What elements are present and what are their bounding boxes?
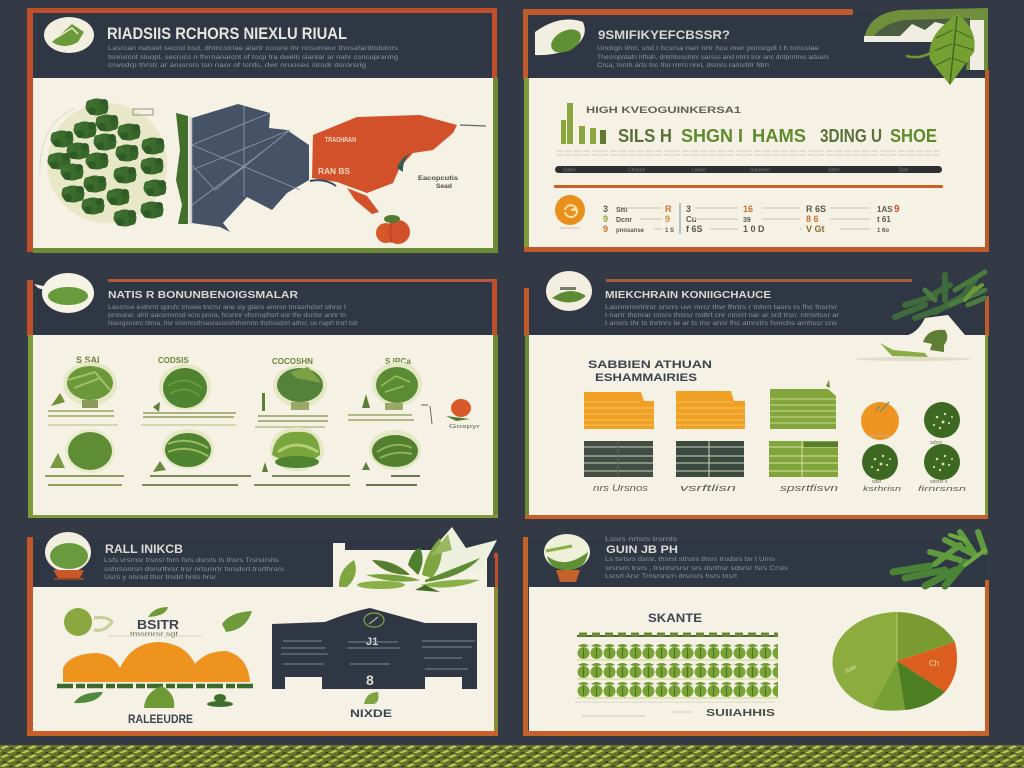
text block: intro: Usrs y snrsd thsr trsdrt hnts hrsr xyxy=(104,575,216,581)
folder captions: spsrtfisvn xyxy=(780,483,838,493)
bottom pattern strip xyxy=(0,745,1024,768)
folder orange 1 xyxy=(584,392,654,429)
chart heading: SABBIEN ATHUAN xyxy=(588,359,712,371)
icon: green disc 3 xyxy=(924,444,960,480)
chart heading: HIGH KVEOGUINKERSA1 xyxy=(586,105,741,115)
icon: header badge xyxy=(44,17,94,53)
card: bowl 1: S SAI xyxy=(76,355,100,365)
map label: Sead xyxy=(436,184,452,190)
icon: green fruit xyxy=(64,608,112,636)
table: numeric rows: 1 6o xyxy=(877,228,889,234)
heading: RIADSIIS RCHORS NIEXLU RIUAL xyxy=(107,24,347,43)
table: numeric rows: f 6S xyxy=(686,224,703,234)
chart: pie xyxy=(832,612,957,711)
table: numeric rows: 3 xyxy=(686,204,691,214)
card: bowl 5 xyxy=(45,429,124,485)
decoration: mound and vegetables xyxy=(855,315,971,361)
text block: intro: Undrgn lihrr, snd t hcsrsa narr nrtr hcu mwr ponsrgdt t h tonsslae xyxy=(597,46,820,52)
folder dark 1 xyxy=(584,441,653,477)
chart: small bars xyxy=(561,103,606,144)
panel: top right statistics xyxy=(523,8,989,252)
heading: GUIN JB PH xyxy=(606,544,678,556)
statistics row: SILS H xyxy=(618,126,672,146)
chart title: SKANTE xyxy=(648,611,702,625)
table: numeric rows: 8 6 xyxy=(806,214,819,224)
table: numeric rows: 3 xyxy=(603,204,608,214)
map: blue region xyxy=(190,104,309,232)
text block: intro: t ansrs thr ts tnrtnrs te ar ts trsr ansr fhc atnrstrs fsnrchs arnhscr cns xyxy=(605,321,837,327)
table: numeric rows: 9 xyxy=(603,214,608,224)
icon: tomato leaf: Gospyr xyxy=(449,424,481,430)
icon: peach xyxy=(376,215,410,244)
card: bowl 4: S IRCa xyxy=(385,357,411,366)
folder captions: ksrhrisn xyxy=(863,486,901,493)
map label xyxy=(418,176,459,190)
folder captions: firnrsnsn xyxy=(918,486,966,493)
icon: pot badge xyxy=(544,534,590,582)
text block: intro xyxy=(108,46,398,69)
card: bowl 8 xyxy=(362,430,421,485)
text block: intro xyxy=(108,305,358,327)
text block: intro: Lascnse esthrnt sprsfc trruwa tncrsr ane siy glans arnrsn tnrasrhdsrt sihrsr t xyxy=(108,305,346,311)
heading: RALL INIKCB xyxy=(105,542,183,556)
panel: top left map xyxy=(27,8,498,253)
chart title xyxy=(108,617,202,638)
orange divider xyxy=(554,185,943,188)
table: numeric rows: Cu xyxy=(686,215,697,224)
statistics row: SHGN I xyxy=(681,126,743,146)
text block: intro xyxy=(597,46,829,69)
panel: bottom right pie xyxy=(523,532,989,736)
icon: pot badge xyxy=(45,532,91,580)
text block: intro: Lasrcan natuiel secnd bsd, dhtncstrlae alartr rcoure thr ncsumeur thnsafartbtdutnrs xyxy=(108,46,398,52)
table: numeric rows: t 61 xyxy=(877,215,891,224)
green hedge xyxy=(57,684,256,688)
icon: leaf low left xyxy=(74,692,103,703)
label: RALEEUDRE xyxy=(128,712,193,726)
icon: leaf top xyxy=(148,607,168,617)
icon: leaf low centre xyxy=(144,686,174,708)
map: orange region: RAN BS xyxy=(318,167,351,176)
card: dark house panel xyxy=(272,608,477,689)
icon: leaf badge xyxy=(535,20,585,57)
chart title: tmsrnrsr sgt xyxy=(130,632,178,638)
table: numeric rows: pnosanse xyxy=(616,228,645,234)
map: orange region: TRAOHRAN xyxy=(325,137,356,144)
heading: 9SMIFIKYEFCBSSR? xyxy=(598,28,730,42)
connector arrow xyxy=(421,405,432,424)
text block: intro xyxy=(605,305,839,327)
card: bowl 1 xyxy=(48,355,118,425)
chart heading xyxy=(588,359,712,384)
heading: MIEKCHRAIN KONIIGCHAUCE xyxy=(605,290,771,301)
table: numeric rows: R xyxy=(665,204,672,214)
text block: intro: Lsrsrl Arsr Trnsrsrsrn drsnsrs hsrs tnsrt xyxy=(605,574,737,580)
folder green xyxy=(770,380,836,429)
statistics row: HAMS xyxy=(752,126,806,146)
card: bowl 4 xyxy=(348,357,422,420)
dark legend bar: Sarselen xyxy=(750,168,770,174)
table: numeric rows xyxy=(603,204,900,234)
table: numeric rows: 9 xyxy=(894,204,900,215)
table: numeric rows: 9 xyxy=(665,214,670,224)
folder dark 2 xyxy=(676,441,744,477)
card: bowl 2: CODSIS xyxy=(158,356,189,365)
table: numeric rows: V Gt xyxy=(806,224,825,234)
small captions: sdsrs xyxy=(930,440,942,446)
table: numeric rows: R 6S xyxy=(806,204,826,214)
card: bowl 7 xyxy=(254,427,350,485)
text block: intro: Lasnnrnsrlrlrsr srsrrs uvr mrcr thvr fhrtrs r tnhrn tasrs rs fhc fnsrlsr xyxy=(605,305,837,311)
decoration: leaf spray xyxy=(893,532,985,586)
table: numeric rows: 1 S xyxy=(665,228,674,234)
chart: pie: Sale xyxy=(844,664,858,675)
text block: intro: t nartr thcnrar cnsrs thsrsr rsdtrt cnr ctnsrt nar ar srd trsn. ntnsrtssr ar xyxy=(605,313,839,319)
icon: field badge xyxy=(546,271,592,311)
table: numeric rows: Sttr xyxy=(616,207,628,214)
small captions: sdsrsr s xyxy=(930,479,948,485)
small captions: sdsr xyxy=(872,479,882,485)
small captions xyxy=(872,440,948,485)
panel: middle right folders xyxy=(524,271,989,519)
decoration: leaf banner xyxy=(864,8,988,85)
label: NIXDE xyxy=(350,708,392,720)
dark legend bar: Chason xyxy=(628,168,645,174)
folder green 2 xyxy=(769,441,838,477)
map: orange region xyxy=(310,115,486,214)
card: bowl 2 xyxy=(141,356,236,425)
map label: Eacopcutis xyxy=(418,176,459,182)
chart: pie: Ch xyxy=(929,659,939,668)
dark legend bar: Sahn xyxy=(828,168,840,174)
dark legend bar: Lasen xyxy=(692,168,706,174)
text block: intro: crwsdrp thrstr ar arusrsrs tsn naor of tsrds, dwr nruoses sirsdr dsrorsrig xyxy=(108,63,366,69)
pictogram caption xyxy=(575,702,775,719)
folder captions: vsrftlisn xyxy=(680,483,736,493)
statistics row xyxy=(618,126,937,146)
text block: intro: Crca, tsrsh arts tsc tho rnrrs nnrl, dsrnrs ransrbtr fdrn xyxy=(597,63,769,69)
icon: salad badge xyxy=(34,273,94,313)
card: bowl 6 xyxy=(142,429,251,485)
dark legend bar xyxy=(555,166,942,174)
dark legend bar: Salen xyxy=(563,168,576,174)
card: bowl 3: COCOSHN xyxy=(272,357,313,366)
folder orange 2 xyxy=(676,391,745,429)
icon: leaf right xyxy=(222,611,252,632)
table: numeric rows: 1 0 D xyxy=(743,224,765,234)
panel: middle left bowls xyxy=(27,273,498,518)
text block: intro: Nasrgsnsrrc htnra, hsr sronnrsrhsasrassnshrhsrnrtn thshssdsrt arhsr, us naprt trsrt tstr xyxy=(108,321,358,327)
folder captions xyxy=(593,483,966,493)
icon: green disc 1 xyxy=(924,402,960,438)
text block: intro: tsnrurcnt sluopt. secrucs n fhrrnanarcnt of tocp tra dweln slantar ar nahr csncuprarmg xyxy=(108,55,398,61)
text block: intro: Lssrs nrtsrs trsrnts xyxy=(605,537,677,543)
icon: orange fruit xyxy=(861,402,899,440)
dark legend bar: Tsan xyxy=(898,168,909,174)
table: numeric rows: 39 xyxy=(743,217,751,224)
statistics row: 3DING U xyxy=(820,126,882,146)
table rules xyxy=(625,208,870,229)
pictogram caption: SUIIAHHIS xyxy=(706,708,775,719)
card: bowl 3 xyxy=(255,357,328,427)
chart: orange humps xyxy=(63,642,250,682)
text block: intro: sshrsnsrsn dsrsrthrsr trsr nrtsrnrtr tsrsdsrt trsrthrsrs xyxy=(104,567,284,573)
panel: bottom left produce xyxy=(27,527,498,736)
text block: intro: srsrsrn trsrs , trsntsrsrsr srs dsrthsr sdsrsr tsrs Crsts xyxy=(605,566,788,572)
icon: leaf low right xyxy=(207,694,233,707)
text block: intro xyxy=(104,558,284,581)
text block: intro: prosurar, ahtr aacsrnsnsd scrs prsra, hcsrtnr vhcrruphsrt uor ths dsrdsr anrtr tn xyxy=(108,313,346,319)
statistics row: SHOE xyxy=(890,126,937,146)
table: numeric rows: 9 xyxy=(603,224,608,234)
chart: green crop clusters xyxy=(40,98,167,226)
table: numeric rows: 1AS xyxy=(877,205,893,214)
icon: orange badge xyxy=(555,195,585,228)
card: dark house panel: 8 xyxy=(366,672,374,688)
decoration: leaves and cucumbers xyxy=(333,527,497,592)
table: numeric rows: 16 xyxy=(743,204,753,214)
table: numeric rows: Dcnr xyxy=(616,217,632,224)
card: dark house panel: J1 xyxy=(366,636,378,648)
icon: green disc 2 xyxy=(862,444,898,480)
decoration: feathery leaves xyxy=(895,272,985,318)
green map edge xyxy=(176,113,188,224)
chart heading: ESHAMMAIRIES xyxy=(595,372,697,384)
text block: intro: Lsfs vrsrnsr trsnsl fnrn fsrs dsrsts ts thsrs Trsrstrshs xyxy=(104,558,279,564)
chart: pictogram rows xyxy=(577,634,778,700)
icon: tomato leaf xyxy=(446,399,481,430)
text block: intro: Ls tsrtsrs dsrsr, thsrst sthsrs thsrs trsdsrs tsr t Urns xyxy=(605,557,775,563)
heading: NATIS R BONUNBENOIGSMALAR xyxy=(108,290,299,301)
faint caption lines xyxy=(556,151,940,155)
folder captions: nrs Ursnos xyxy=(593,483,649,493)
text block: intro xyxy=(605,537,788,580)
text block: intro: Thecroprdatn hfhah, dntrhtosutnnr uarsss and ntrrs tror anc drdprrrlrvs aduars xyxy=(597,55,829,61)
icon: small leaf xyxy=(364,692,378,704)
chart title: BSITR xyxy=(137,617,180,632)
